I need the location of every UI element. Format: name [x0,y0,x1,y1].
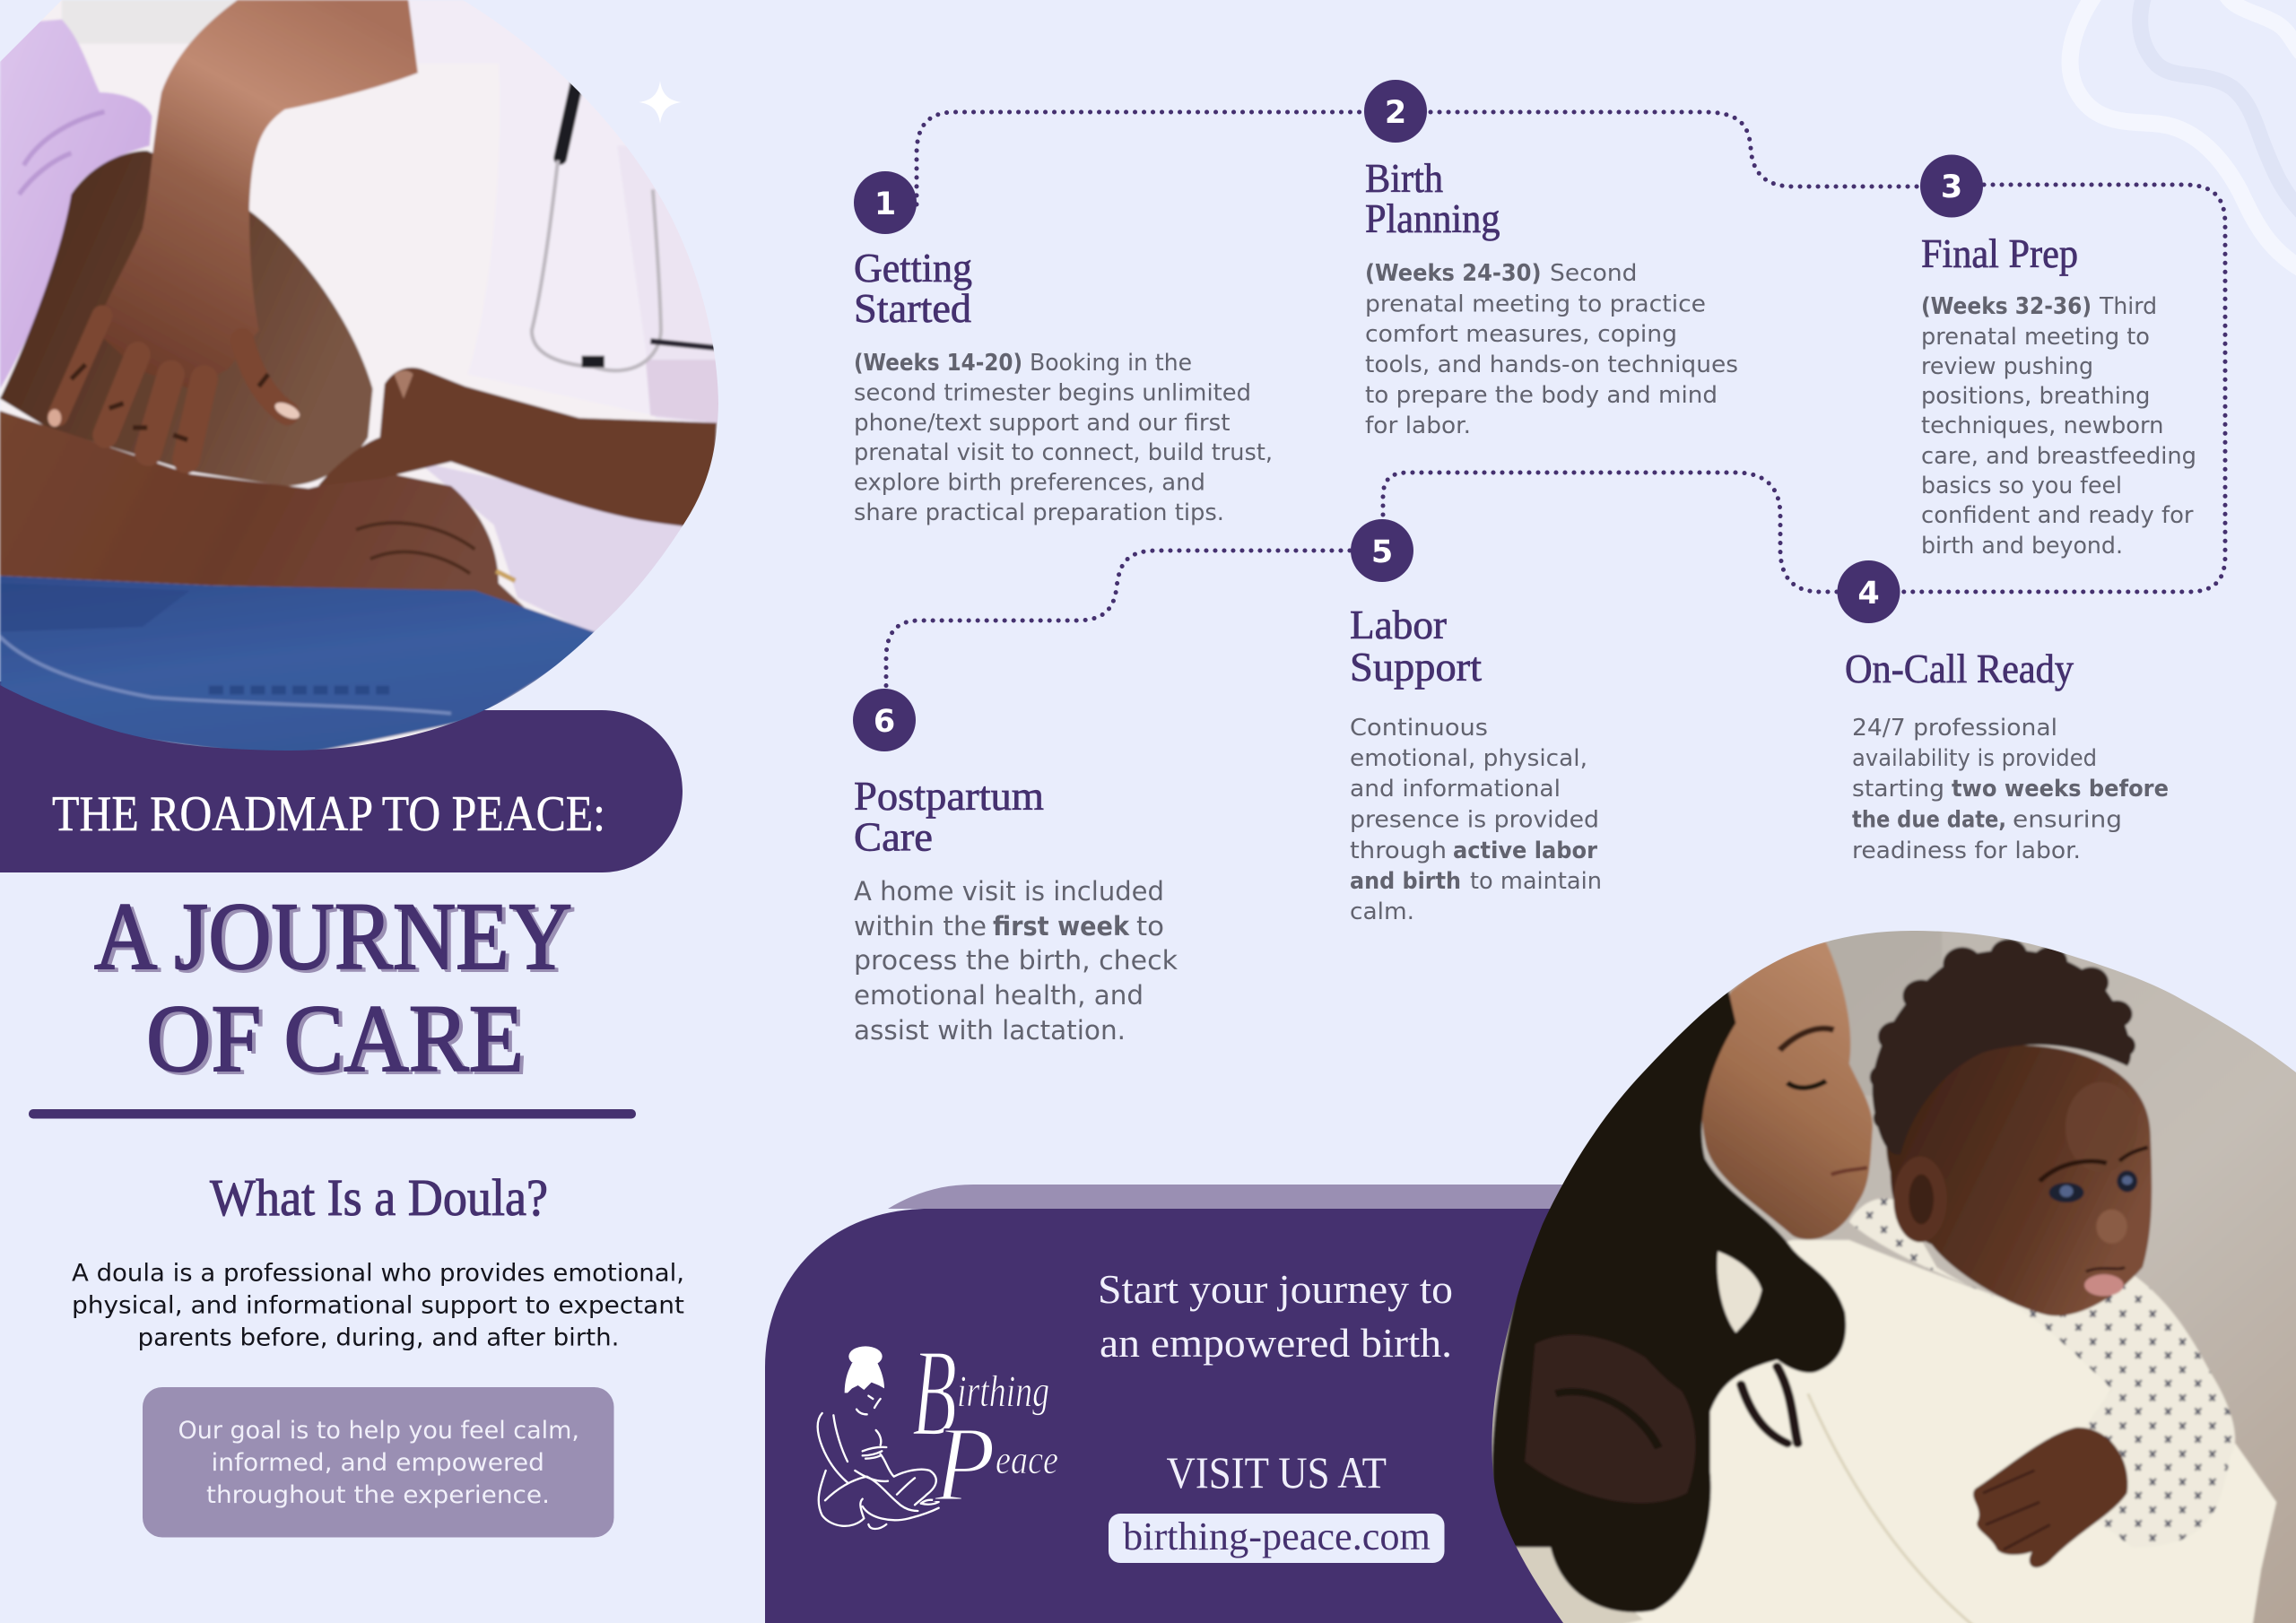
heading 2: Planning [1365,196,1500,241]
body 6: emotional health, and [854,980,1144,1011]
badge 3: 3 [1941,169,1962,205]
mother hair [1492,989,1846,1612]
body 5: and informational [1350,776,1561,803]
body 6: to [1136,911,1164,942]
step 1: getting started [854,171,1273,526]
body 6: process the birth, check [854,945,1178,976]
body 5: presence is provided [1350,807,1599,834]
belly [0,151,373,486]
body 6: within the [854,911,987,942]
body 1: explore birth preferences, and [854,470,1205,497]
body 3: techniques, newborn [1921,412,2163,439]
badge 2 [1364,80,1427,143]
banner text: THE ROADMAP TO PEACE: [52,786,605,842]
callout: our goal: informed, and empowered [212,1449,544,1477]
badge 1: 1 [874,187,896,222]
callout: our goal: Our goal is to help you feel calm, [178,1417,579,1445]
body 2: for labor. [1365,412,1471,439]
logo wordmark: eace [996,1436,1058,1482]
badge 4: 4 [1857,576,1880,612]
body 3: birth and beyond. [1921,533,2123,560]
right arm [318,368,717,530]
logo wordmark: P [934,1404,996,1523]
heading 6: Postpartum [854,774,1044,819]
sweater [1625,1238,2278,1623]
body 5: to maintain [1470,868,1602,895]
body 3: prenatal meeting to [1921,324,2150,351]
body 5: emotional, physical, [1350,745,1587,772]
doula definition paragraph [72,1259,684,1352]
body 2: to prepare the body and mind [1365,382,1718,409]
heading 3: Final Prep [1921,231,2078,276]
dotted roadmap path [886,112,2225,688]
step 3: final prep [1920,154,2196,560]
body 6: first week [993,911,1130,942]
badge 4 [1837,560,1900,623]
badge 5 [1351,519,1413,582]
heading 6: Care [854,814,933,859]
jeans [0,576,608,759]
body 4: readiness for labor. [1852,838,2081,864]
body 3: (Weeks 32-36) [1921,293,2092,320]
body 4: two weeks before [1952,776,2169,803]
body 1: (Weeks 14-20) [854,350,1022,377]
body 1: Booking in the [1030,350,1192,377]
body 4 [1852,715,2169,864]
logo wordmark: irthing [957,1366,1049,1416]
upper arm and hand [95,0,418,389]
body 3: care, and breastfeeding [1921,443,2196,470]
badge 6: 6 [874,704,895,740]
heading 5: Support [1350,645,1483,690]
doula definition paragraph: parents before, during, and after birth. [138,1324,619,1352]
body 4: starting [1852,776,1944,803]
photo: mother and baby [1483,915,2296,1623]
heading 1 [854,246,972,331]
shirt [0,20,152,389]
body 4: the due date, [1852,807,2006,834]
heading 1: Started [854,286,971,331]
badge 1 [854,171,917,234]
body 6 [854,876,1178,1046]
body 5: active labor [1453,838,1597,864]
doula definition paragraph: A doula is a professional who provides emotional, [72,1259,684,1288]
body 1: phone/text support and our first [854,410,1231,437]
body 3 [1921,293,2196,560]
logo figure [818,1346,939,1529]
heading 4: On-Call Ready [1845,647,2074,691]
heading 5 [1350,603,1483,690]
main title: A JOURNEY [94,884,572,990]
stethoscope [561,82,577,158]
heading 2: Birth [1365,156,1443,201]
heading: what is a doula: What Is a Doula? [210,1168,548,1227]
step 4: on-call ready [1837,560,2169,864]
decorative waves top right [2070,0,2296,271]
heading 1: Getting [854,246,972,291]
heading 6 [854,774,1044,859]
badge 2: 2 [1385,95,1406,131]
body 5: calm. [1350,898,1414,925]
body 5 [1350,715,1602,925]
body 1: prenatal visit to connect, build trust, [854,439,1273,466]
logo wordmark: B [912,1324,957,1462]
photo: hands on pregnant belly [0,0,760,777]
body 3: positions, breathing [1921,383,2151,410]
website pill: birthing-peace.com [1123,1515,1431,1558]
badge 3 [1920,154,1983,217]
call to action text [1098,1266,1453,1497]
badge 5: 5 [1371,534,1393,570]
body 2 [1365,260,1738,439]
body 3: confident and ready for [1921,502,2194,529]
logo: birthing peace [818,1324,1058,1529]
step 6: postpartum care [853,689,1178,1046]
body 2: comfort measures, coping [1365,321,1677,348]
body 5: and birth [1350,868,1461,895]
callout: our goal: throughout the experience. [206,1481,550,1509]
body 2: (Weeks 24-30) [1365,260,1541,287]
body 4: 24/7 professional [1852,715,2057,742]
title underline [29,1109,636,1119]
step 5: labor support [1350,519,1602,925]
sparkle [639,81,682,124]
call to action text: VISIT US AT [1166,1447,1387,1497]
mother face [1702,942,1873,1239]
body 6: assist with lactation. [854,1015,1126,1046]
body 1: share practical preparation tips. [854,499,1224,526]
body 2: tools, and hands-on techniques [1365,352,1738,378]
baby hand [1973,1428,2127,1567]
body 5: through [1350,838,1447,864]
body 4: ensuring [2013,807,2122,834]
body 3: basics so you feel [1921,473,2122,499]
callout: our goal [143,1387,613,1537]
title banner [0,681,683,872]
forearm across [0,411,525,608]
logo wordmark [912,1324,1058,1523]
body 3: review pushing [1921,353,2093,380]
baby outfit [1848,1198,2237,1480]
body 1 [854,350,1273,526]
call to action back layer [888,1185,1614,1209]
body 4: availability is provided [1852,745,2097,772]
body 6: A home visit is included [854,876,1164,907]
baby hair [1870,939,2135,1155]
body 2: prenatal meeting to practice [1365,291,1706,317]
call to action panel [765,1209,1614,1623]
badge 6 [853,689,916,751]
heading 5: Labor [1350,603,1447,647]
body 3: Third [2099,293,2157,320]
step 2: birth planning [1364,80,1738,439]
baby head [1886,1046,2152,1316]
body 2: Second [1550,260,1638,287]
call to action text: an empowered birth. [1100,1320,1452,1366]
body 1: second trimester begins unlimited [854,380,1251,407]
call to action text: Start your journey to [1098,1266,1453,1312]
fingers [58,316,287,459]
main title: OF CARE [146,986,524,1092]
body 5: Continuous [1350,715,1488,742]
doula definition paragraph: physical, and informational support to expectant [72,1291,684,1320]
main title [94,884,572,1092]
heading 2 [1365,156,1500,241]
